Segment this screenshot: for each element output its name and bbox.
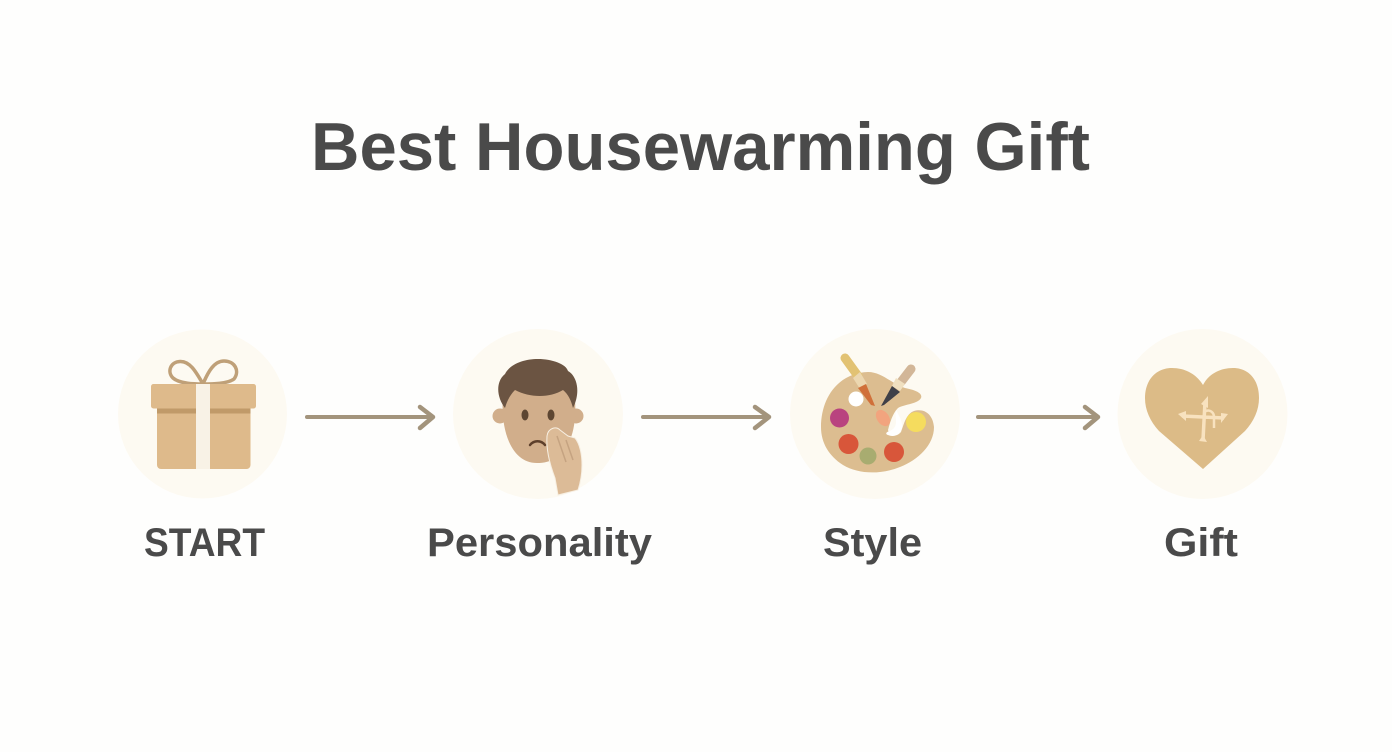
arrow: Personality to Style (643, 407, 769, 428)
step: Gift (1118, 329, 1288, 565)
step: Style (790, 329, 960, 565)
icon: heart with cross (1118, 329, 1288, 499)
label: START: START (144, 521, 265, 565)
icon: paint palette (790, 329, 960, 499)
step: START (118, 330, 287, 565)
label: Personality: Personality (427, 521, 653, 565)
arrow: START to Personality (307, 407, 433, 428)
label: Gift: Gift (1164, 521, 1238, 565)
icon: gift box (118, 330, 287, 498)
title: Best Housewarming Gift (311, 109, 1090, 185)
icon: thinking face (453, 329, 623, 499)
arrow: Style to Gift (978, 407, 1098, 428)
label: Style: Style (823, 521, 922, 565)
step: Personality (427, 329, 653, 565)
